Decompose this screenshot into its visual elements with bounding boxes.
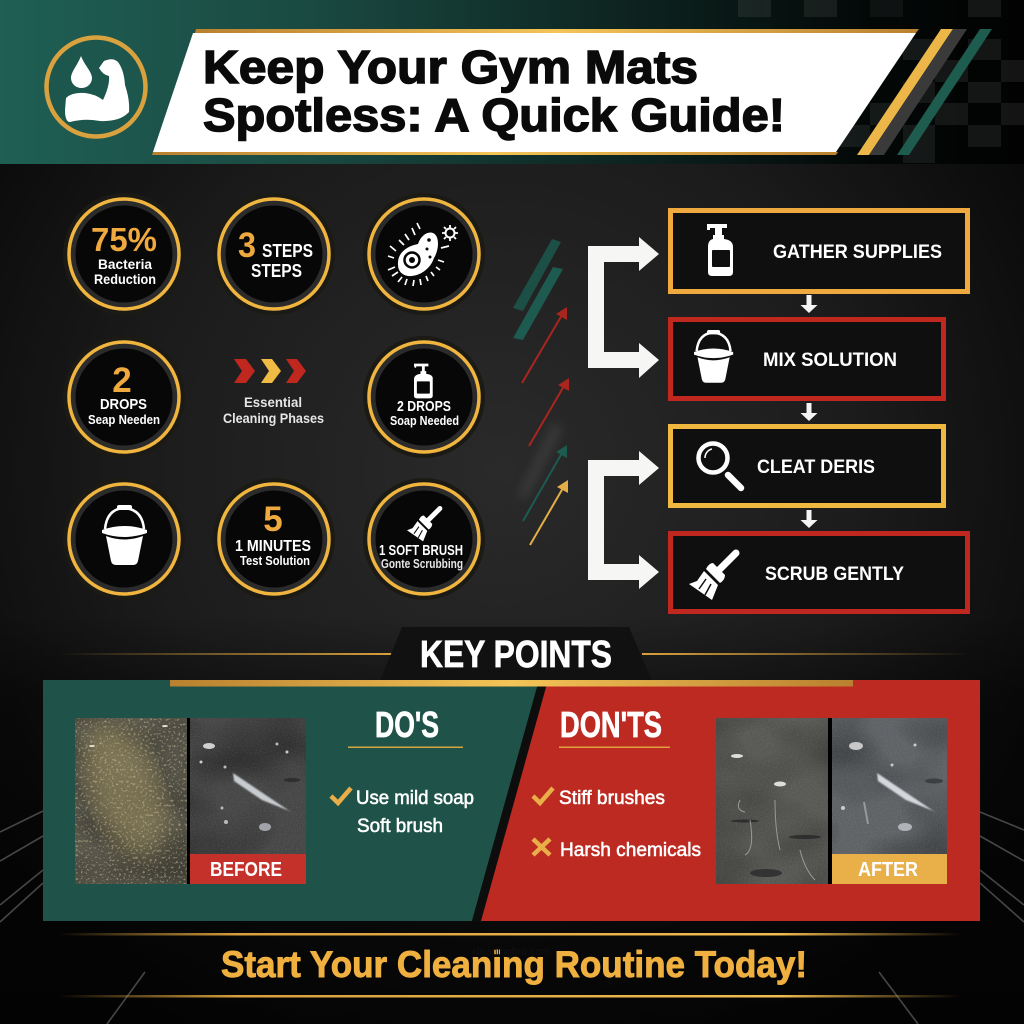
before label: BEFORE (210, 859, 282, 881)
stat badge: 2 drops: Seap Needen (88, 412, 160, 427)
step: scrub gently (670, 534, 968, 612)
essential cleaning phases (223, 359, 324, 426)
don'ts list: Stiff brushes (559, 788, 665, 809)
header band (0, 0, 1024, 164)
stat badge: 2 drops soap needed (363, 336, 485, 458)
stat badge: 75% bacteria reduction (63, 193, 185, 315)
badge: bacteria icon (363, 193, 485, 315)
icon: soap bottle (707, 224, 733, 276)
do's list: Soft brush (357, 816, 443, 837)
step: gather supplies: GATHER SUPPLIES (773, 241, 942, 263)
stat badge: 5 minutes: 5 (263, 500, 283, 539)
icon: brush (407, 508, 440, 541)
title banner (152, 29, 919, 155)
arrow: red upper (522, 307, 567, 383)
stat badge: 3 steps: STEPS (251, 261, 302, 281)
don'ts list: Harsh chemicals (560, 840, 701, 861)
step: mix solution (670, 320, 944, 398)
decorative slanted bars and arrows (513, 239, 569, 545)
stat badge: 3 steps: STEPS (262, 241, 313, 261)
step: clear debris: CLEAT DERIS (757, 456, 875, 478)
icon: check (533, 788, 553, 803)
stat badge: 3 steps (213, 193, 335, 315)
stat badge: 2 drops (63, 336, 185, 458)
chevrons (234, 359, 306, 383)
essential cleaning phases: Cleaning Phases (223, 410, 324, 426)
stat badge: 2 drops soap needed: 2 DROPS (397, 398, 451, 415)
stat badge: 2 drops: DROPS (100, 396, 147, 413)
call to action: Start Your Cleaning Routine Today! (221, 944, 807, 985)
stat badge: 75% bacteria reduction: 75% (91, 221, 157, 258)
stat badge: 3 steps: 3 (238, 226, 256, 265)
do's heading: DO'S (375, 704, 439, 745)
after photo pair (716, 718, 947, 884)
essential cleaning phases: Essential (244, 394, 302, 410)
key points heading (380, 627, 652, 681)
stat badge: 5 minutes: 1 MINUTES (235, 538, 311, 555)
after label: AFTER (858, 859, 918, 881)
step: gather supplies (670, 210, 968, 292)
step: scrub gently: SCRUB GENTLY (765, 563, 904, 585)
do's list: Use mild soap (356, 788, 474, 809)
arrow: step 1 to 2 (800, 295, 818, 313)
step: clear debris (670, 426, 944, 506)
arrow: step 2 to 3 (800, 403, 818, 421)
icon: check (331, 788, 351, 803)
stat badge: 5 minutes: Test Solution (240, 553, 310, 568)
icon: cross (533, 839, 550, 855)
stat badge: 2 drops soap needed: Soap Needed (390, 413, 459, 428)
don'ts list (533, 788, 701, 861)
icon: bucket (102, 505, 147, 565)
step: mix solution: MIX SOLUTION (763, 349, 897, 371)
logo badge (46, 38, 146, 136)
icon: microbe (388, 223, 458, 286)
bracket arrow: upper (588, 237, 659, 378)
panel: don'ts (472, 680, 980, 921)
arrow: yellow (530, 480, 568, 545)
arrow: teal (523, 445, 567, 521)
arrow: step 3 to 4 (800, 510, 818, 528)
arrow: red lower (529, 378, 569, 446)
stat badge: 75% bacteria reduction: Bacteria (98, 256, 152, 272)
title text: Keep Your Gym Mats (203, 41, 698, 93)
icon: brush (689, 553, 736, 600)
do's list (331, 788, 474, 837)
icon: bucket (694, 330, 733, 383)
stat badge: 5 minutes (213, 478, 335, 600)
stat badge: 2 drops: 2 (112, 361, 132, 400)
icon: soap bottle (414, 364, 433, 398)
bracket arrow: lower (588, 451, 659, 589)
decorative slanted stripes (857, 29, 992, 155)
after label (832, 854, 947, 884)
key points heading: KEY POINTS (420, 634, 612, 676)
watermark: cleaningbro.com (472, 946, 550, 958)
stat badge: 75% bacteria reduction: Reduction (94, 271, 156, 287)
before label (190, 854, 306, 884)
icon: magnifier (698, 444, 741, 488)
badge: bucket icon (63, 478, 185, 600)
stat badge: soft brush (363, 478, 485, 600)
panel: do's (43, 680, 539, 921)
don'ts heading: DON'TS (560, 704, 662, 745)
stat badge: soft brush: Gonte Scrubbing (381, 557, 463, 571)
icon: flexed arm (65, 59, 129, 122)
stat badge: soft brush: 1 SOFT BRUSH (379, 542, 463, 559)
title banner: Spotless: A Quick Guide! (203, 89, 785, 141)
icon: water drop (71, 56, 92, 88)
before photo pair (69, 713, 306, 884)
